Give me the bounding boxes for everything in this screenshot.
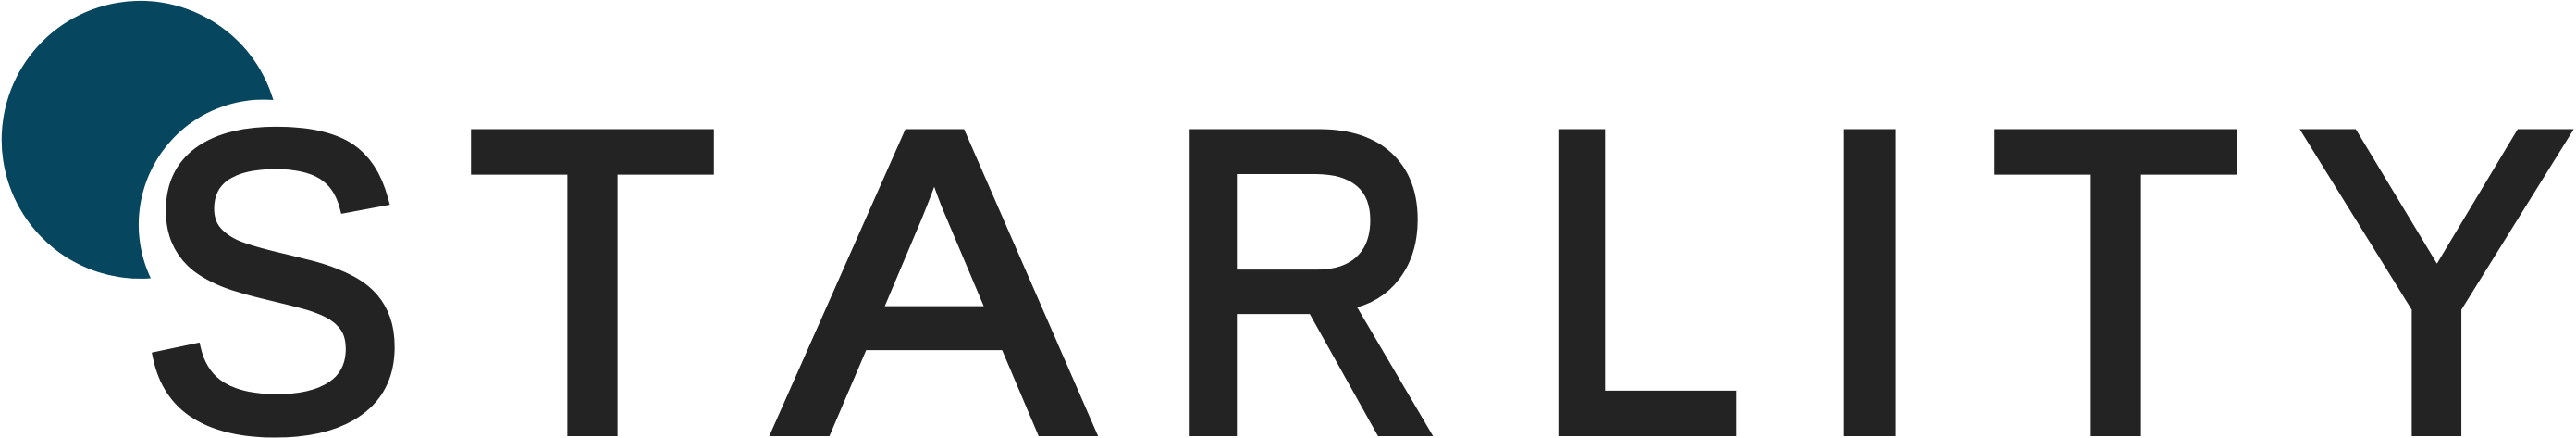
- icon: crescent circle: [2, 1, 274, 279]
